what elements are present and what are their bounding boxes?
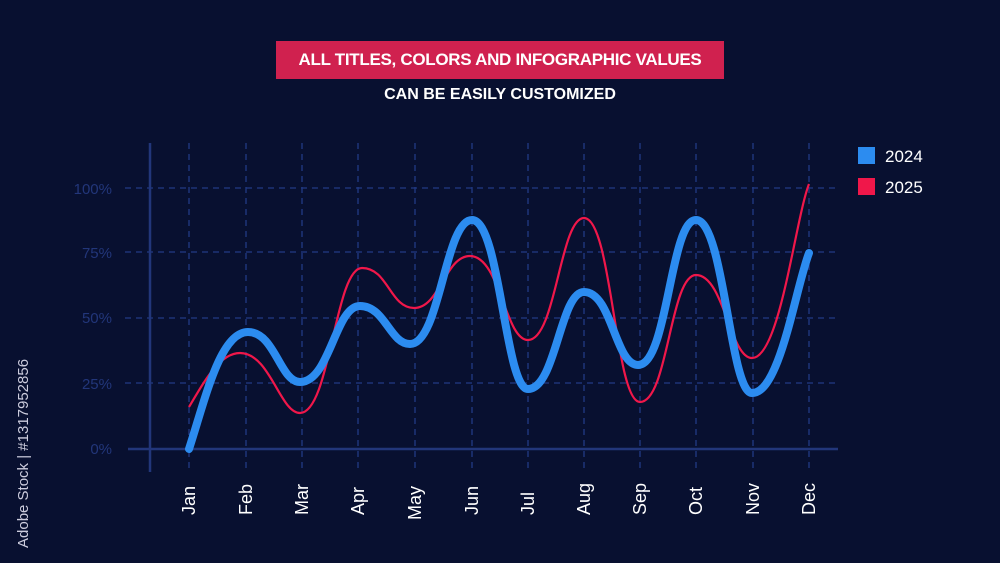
month labels: Jun <box>462 486 482 515</box>
month labels: Jul <box>518 492 538 515</box>
title banner <box>276 41 724 79</box>
title banner: ALL TITLES, COLORS AND INFOGRAPHIC VALUES <box>299 50 701 69</box>
legend: 2025 <box>885 178 923 197</box>
month labels: Oct <box>686 487 706 515</box>
month labels: Feb <box>236 484 256 515</box>
y axis labels: 100% <box>74 181 112 198</box>
y axis labels: 50% <box>82 310 112 327</box>
legend <box>858 147 923 197</box>
month labels: Jan <box>179 486 199 515</box>
month labels: Mar <box>292 484 312 515</box>
month labels: Dec <box>799 483 819 515</box>
month labels: May <box>405 486 425 520</box>
line: 2025 <box>189 184 809 413</box>
y axis labels: 75% <box>82 245 112 262</box>
legend: 2024 <box>885 147 923 166</box>
subtitle: CAN BE EASILY CUSTOMIZED <box>384 86 616 103</box>
y axis labels: 0% <box>90 441 112 458</box>
y axis labels <box>74 181 112 458</box>
y axis labels: 25% <box>82 376 112 393</box>
month labels <box>179 483 819 520</box>
month labels: Nov <box>743 483 763 515</box>
line: 2024 <box>189 220 809 449</box>
month labels: Sep <box>630 483 650 515</box>
side watermark text: Adobe Stock | #1317952856 <box>15 359 32 548</box>
month labels: Aug <box>574 483 594 515</box>
month labels: Apr <box>348 487 368 515</box>
